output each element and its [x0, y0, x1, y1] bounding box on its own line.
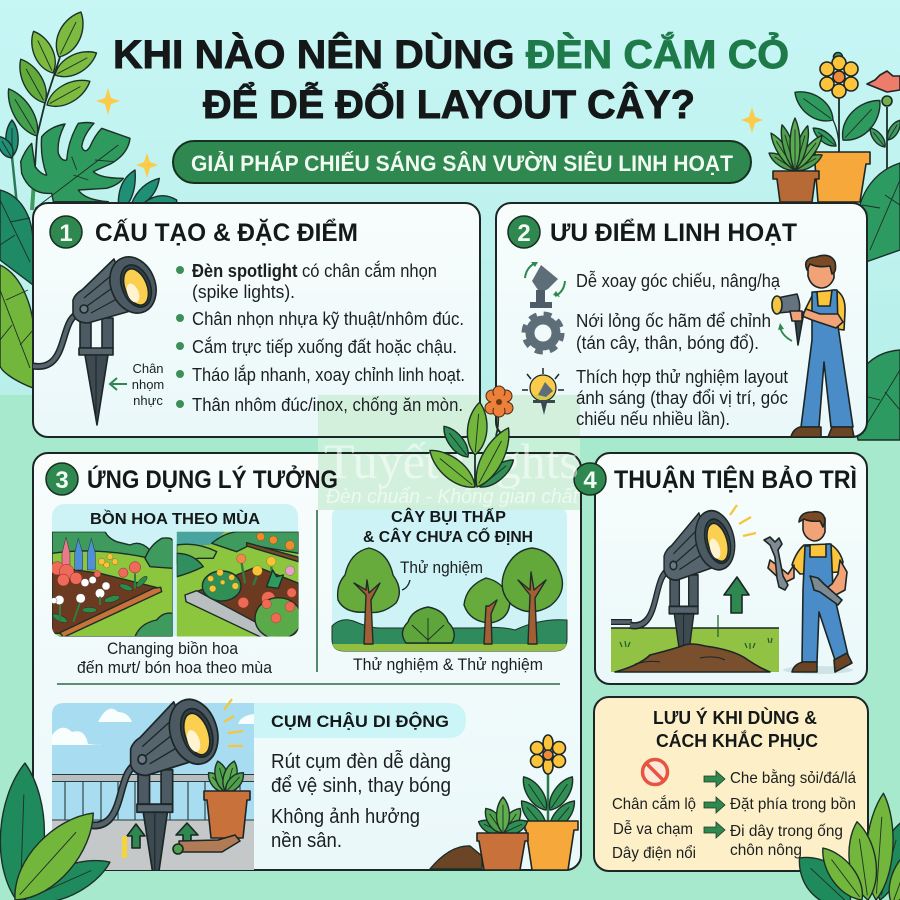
panel 1: cấu tạo & đặc điểm	[33, 203, 480, 437]
number badge 3	[46, 463, 78, 495]
title: KHI NÀO NÊN DÙNG ĐÈN CẮM CỎ	[113, 31, 789, 77]
icon: rotate lamp	[525, 262, 565, 308]
subtitle pill: GIẢI PHÁP CHIẾU SÁNG SÂN VƯỜN SIÊU LINH HOẠT	[191, 151, 734, 176]
fixes: Đi dây trong ống	[730, 823, 843, 840]
large lamp	[92, 698, 219, 870]
advantages text: Dễ xoay góc chiếu, nâng/hạ	[576, 270, 781, 291]
advantages text: Nới lỏng ốc hãm để chỉnh	[576, 311, 771, 331]
feature list: Thân nhôm đúc/inox, chống ăn mòn.	[192, 395, 463, 415]
icon: spike light	[33, 250, 164, 425]
panel 2: ưu điểm linh hoạt	[496, 203, 867, 437]
panel 5: lưu ý khi dùng & cách khắc phục	[594, 697, 868, 871]
title	[113, 31, 789, 127]
problems: Dây điện nổi	[612, 844, 696, 862]
caption: flower beds	[77, 639, 272, 677]
sun rays	[224, 699, 243, 746]
text: movable pot cluster: Không ảnh hưởng	[271, 806, 420, 828]
number badge 1: 1	[59, 220, 73, 247]
arrow and label: spike: nhực	[133, 393, 163, 408]
watermark: Tuyết Lights	[324, 433, 579, 489]
arrows and uprooted item	[122, 823, 240, 858]
number badge 2	[508, 216, 540, 248]
panel 4: thuận tiện bảo trì	[574, 453, 867, 687]
fixes: chôn nông	[730, 842, 802, 859]
icon: gear	[524, 314, 562, 352]
heading 5: LƯU Ý KHI DÙNG &	[653, 707, 817, 728]
foreground foliage: bottom left	[0, 762, 116, 900]
heading 3: ỨNG DỤNG LÝ TƯỞNG	[87, 464, 338, 494]
problems	[612, 794, 696, 862]
heading 2: ƯU ĐIỂM LINH HOẠT	[550, 218, 797, 247]
heading 5: CÁCH KHẮC PHỤC	[656, 730, 818, 751]
heading 4: THUẬN TIỆN BẢO TRÌ	[614, 464, 857, 494]
advantages text: Thích hợp thử nghiệm layout	[576, 367, 788, 387]
caption: trees: Thử nghiệm & Thử nghiệm	[353, 655, 543, 674]
feature list: (spike lights).	[192, 282, 295, 302]
foreground foliage: bottom right	[788, 792, 900, 900]
label: trial: Thử nghiệm	[400, 558, 483, 577]
watermark	[318, 395, 580, 510]
fixes: Đặt phía trong bồn	[730, 796, 856, 813]
plants: top left foliage	[0, 7, 177, 388]
card: seasonal flower beds: BỒN HOA THEO MÙA	[90, 509, 260, 528]
watermark: Đèn chuẩn - Không gian chất	[326, 486, 579, 508]
panel 3: ứng dụng lý tưởng	[33, 453, 581, 893]
card: seasonal flower beds	[51, 504, 302, 677]
advantages text: (tán cây, thân, bóng đổ).	[576, 333, 759, 353]
text: movable pot cluster: Rút cụm đèn dễ dàng	[271, 750, 451, 773]
label: trial: CÂY BỤI THẤP	[391, 507, 506, 526]
center plant with flower	[423, 386, 518, 495]
worker with lamp	[772, 255, 854, 437]
fixes: Che bằng sỏi/đá/lá	[730, 768, 856, 787]
subtitle pill	[173, 141, 751, 183]
advantages text	[576, 270, 788, 429]
label: trial: & CÂY CHƯA CỐ ĐỊNH	[363, 526, 533, 546]
illustration: flower beds	[51, 532, 302, 639]
number badge 3: 3	[55, 467, 69, 494]
label: movable pot cluster	[254, 703, 466, 738]
worker with wrenches	[764, 512, 853, 674]
number badge 4	[574, 463, 606, 495]
arrows	[704, 771, 725, 838]
icons: sparkles	[96, 88, 763, 178]
ground and lamp	[611, 503, 779, 687]
feature list	[176, 260, 465, 415]
feature list: Tháo lắp nhanh, xoay chỉnh linh hoạt.	[192, 364, 465, 385]
caption: flower beds: Changing biồn hoa	[107, 639, 238, 658]
title: ĐỂ DỄ ĐỔI LAYOUT CÂY?	[203, 80, 695, 127]
feature list: Chân nhọn nhựa kỹ thuật/nhôm đúc.	[192, 309, 464, 329]
number badge 4: 4	[583, 467, 597, 494]
label: trial	[363, 507, 533, 590]
card: shrubs and trees	[332, 505, 567, 674]
fixes	[730, 768, 856, 859]
icon: prohibited	[642, 760, 668, 784]
feature list: Đèn spotlight có chân cắm nhọn	[192, 260, 437, 281]
heading 1: CẤU TẠO & ĐẶC ĐIỂM	[95, 218, 358, 247]
potted plant	[204, 759, 250, 838]
caption: flower beds: đến mưt/ bón hoa theo mùa	[77, 658, 272, 677]
text: movable pot cluster	[271, 750, 451, 852]
plants: top right pots and flowers	[766, 52, 900, 440]
scene: terrace with large lamp	[52, 698, 254, 870]
arrow and label: spike	[110, 361, 164, 408]
advantages text: chiếu nếu nhiều lần).	[576, 409, 730, 429]
arrow and label: spike: Chân	[132, 361, 164, 376]
text: movable pot cluster: để vệ sinh, thay bóng	[271, 775, 451, 797]
icon: light bulb lamp	[522, 368, 564, 415]
text: movable pot cluster: nền sân.	[271, 830, 342, 852]
problems: Dễ va chạm	[613, 819, 693, 838]
label: movable pot cluster: CỤM CHẬU DI ĐỘNG	[271, 712, 449, 731]
number badge 2: 2	[517, 220, 531, 247]
problems: Chân cắm lộ	[612, 794, 696, 813]
heading 5	[653, 707, 818, 751]
number badge 1	[50, 216, 82, 248]
arrow and label: spike: nhọm	[132, 377, 164, 392]
trees	[338, 548, 562, 644]
advantages text: ánh sáng (thay đổi vị trí, góc	[576, 388, 788, 408]
pots with flower and soil	[430, 735, 580, 870]
feature list: Cắm trực tiếp xuống đất hoặc chậu.	[192, 336, 457, 357]
